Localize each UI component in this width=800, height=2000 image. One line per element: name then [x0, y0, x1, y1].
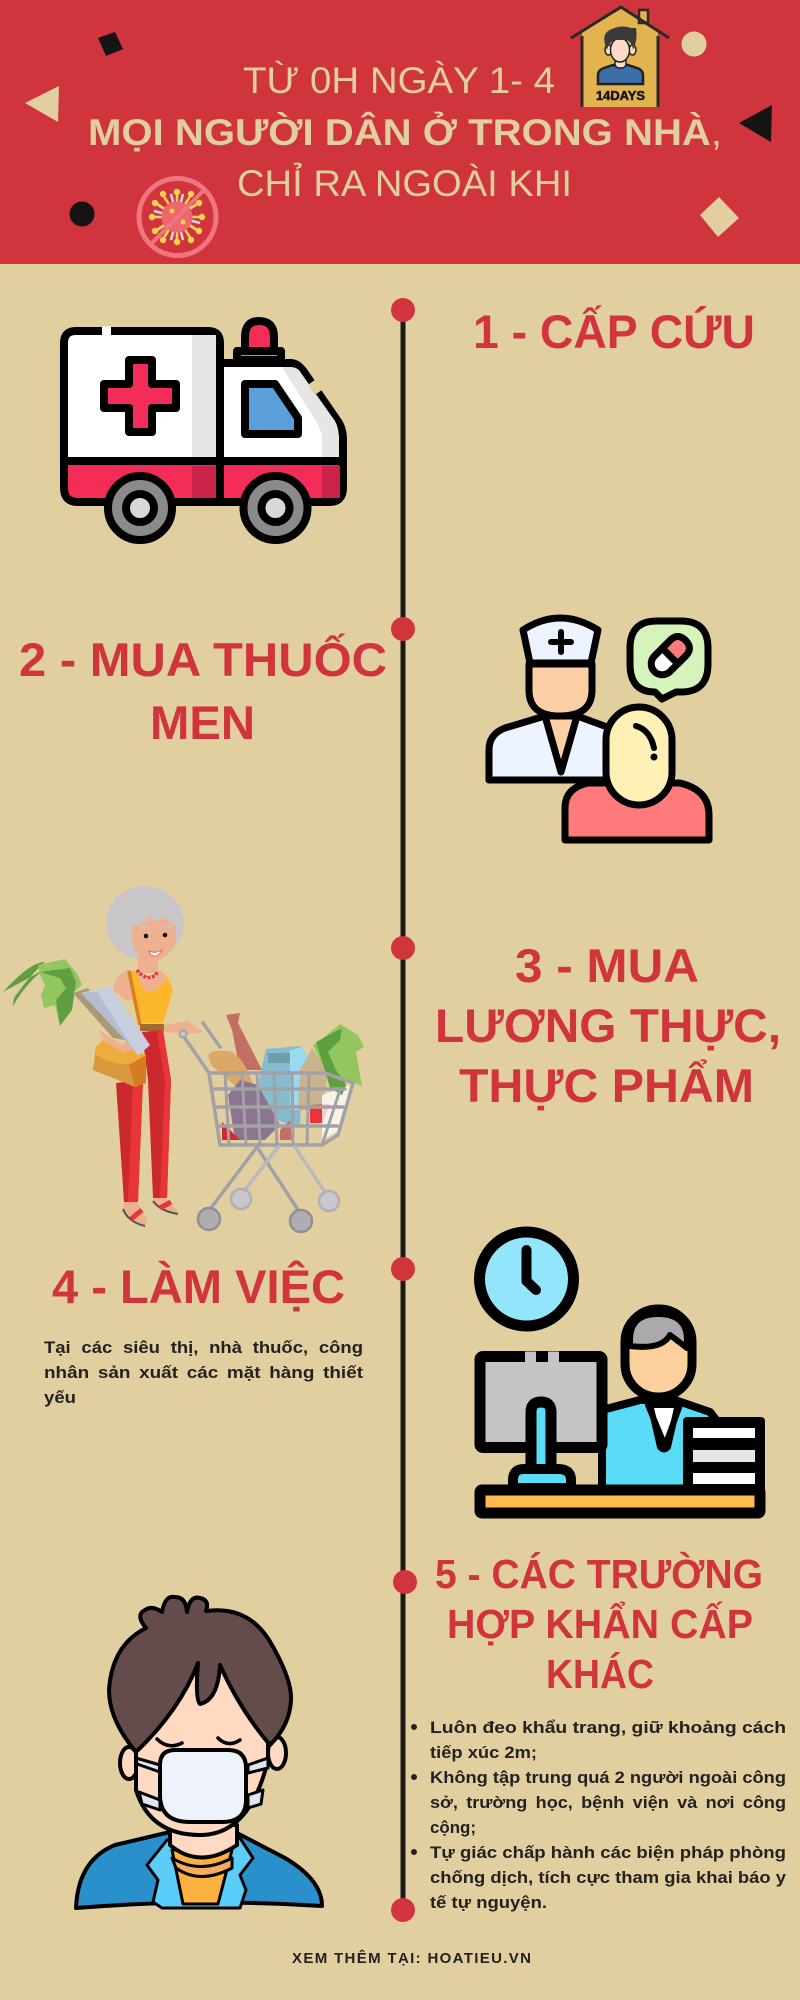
red trousers — [116, 1030, 171, 1202]
paper stack — [687, 1421, 761, 1489]
bullet 3 — [411, 1844, 787, 1912]
decorative shape: tan diamond — [700, 197, 739, 237]
right arm — [164, 1021, 203, 1034]
sandals — [123, 1198, 178, 1226]
title: CHỈ RA NGOÀI KHI — [237, 163, 572, 204]
heading: 2 - mua thuoc men: 2 - MUA THUỐC — [19, 633, 387, 686]
hair — [106, 886, 184, 960]
heading: 2 - mua thuoc men: MEN — [150, 696, 255, 749]
decorative shape: black diamond — [98, 32, 123, 56]
heading: 5 - cac truong hop khan cap khac: 5 - CÁC TRƯỜNG — [435, 1551, 763, 1597]
icon: doctor and patient — [489, 618, 709, 840]
shopping cart — [180, 1013, 364, 1232]
text block: working note: Tại các siêu thị, nhà thuốc, công — [44, 1339, 363, 1357]
heading: 3 - mua luong thuc thuc pham — [435, 939, 781, 1112]
clock — [480, 1232, 574, 1326]
decorative shape: tan circle — [682, 32, 706, 56]
heading: 3 - mua luong thuc thuc pham: LƯƠNG THỰC, — [435, 999, 781, 1052]
face — [132, 914, 176, 963]
footer: XEM THÊM TẠI: HOATIEU.VN — [292, 1949, 531, 1967]
shoulder bag — [93, 1040, 146, 1087]
icon: person wearing mask — [76, 1597, 322, 1908]
text block: working note: nhân sản xuất các mặt hàng thiết — [44, 1364, 364, 1382]
timeline — [391, 298, 417, 1922]
heading: 4 - lam viec: 4 - LÀM VIỆC — [52, 1260, 345, 1313]
bullet 2 — [411, 1769, 786, 1837]
timeline dot 5 — [393, 1570, 417, 1594]
heading: 2 - mua thuoc men — [19, 633, 387, 749]
decorative shape: black circle — [70, 202, 94, 226]
newspaper box — [81, 986, 150, 1056]
torso — [127, 970, 173, 1023]
timeline dot 4 — [391, 1257, 415, 1281]
heading: 5 - cac truong hop khan cap khac — [435, 1551, 763, 1697]
title: MỌI NGƯỜI DÂN Ở TRONG NHÀ , — [88, 111, 722, 153]
heading: 3 - mua luong thuc thuc pham: 3 - MUA — [515, 939, 699, 992]
heading: 5 - cac truong hop khan cap khac: KHÁC — [546, 1651, 654, 1697]
bullet 2: cộng; — [430, 1819, 476, 1837]
bullet 3: chống dịch, tích cực tham gia khai báo y — [430, 1869, 787, 1887]
decorative shape: black triangle — [739, 105, 772, 142]
closed eyes — [157, 1738, 240, 1746]
illustration: woman with shopping cart — [3, 886, 364, 1232]
heading: 5 - cac truong hop khan cap khac: HỢP KHẨN CẤP — [447, 1600, 753, 1647]
face — [136, 1660, 268, 1835]
timeline end dot — [391, 1898, 415, 1922]
bullet 2: sở, trường học, bệnh viện và nơi công — [430, 1794, 786, 1812]
cart wheels — [198, 1189, 339, 1232]
cart basket grid — [182, 1023, 353, 1210]
icon: house with person, 14 days: 14DAYS — [596, 88, 645, 103]
timeline dot 3 — [391, 936, 415, 960]
bullet 1: Luôn đeo khẩu trang, giữ khoảng cách — [430, 1719, 786, 1737]
title: TỪ 0H NGÀY 1- 4 — [243, 60, 555, 101]
mask — [136, 1750, 268, 1822]
collar — [147, 1835, 253, 1908]
heading: 3 - mua luong thuc thuc pham: THỰC PHẨM — [459, 1059, 754, 1112]
desk — [480, 1490, 760, 1513]
icon: office worker with clock — [480, 1232, 761, 1513]
worker — [602, 1309, 720, 1490]
greens held by woman — [3, 959, 82, 1026]
shoulders — [76, 1832, 322, 1908]
icon: ambulance — [64, 321, 343, 540]
icon: crossed-out virus — [139, 178, 216, 256]
bullet 3: Tự giác chấp hành các biện pháp phòng — [430, 1844, 786, 1862]
panel: red header — [0, 0, 800, 264]
bullet 2: Không tập trung quá 2 người ngoài công — [430, 1769, 786, 1787]
title — [88, 60, 722, 204]
decorative shape: tan triangle — [25, 86, 59, 122]
timeline dot 2 — [391, 617, 415, 641]
heading: 1 - cap cuu: 1 - CẤP CỨU — [473, 305, 755, 358]
left arm — [99, 1030, 143, 1052]
text block: working note: yếu — [44, 1389, 76, 1407]
belt — [140, 1024, 164, 1031]
monitor — [480, 1356, 602, 1448]
bullet 1: tiếp xúc 2m; — [430, 1744, 537, 1762]
hair — [109, 1597, 291, 1752]
bullet 1 — [411, 1719, 786, 1762]
text block: bullet list — [411, 1719, 787, 1912]
timeline dot 1 — [391, 298, 415, 322]
bullet 3: tế tự nguyện. — [430, 1894, 547, 1912]
text block: working note — [44, 1339, 364, 1407]
cart goods — [208, 1013, 364, 1140]
ears — [120, 1747, 138, 1779]
icon: house with person, 14 days — [571, 7, 669, 107]
